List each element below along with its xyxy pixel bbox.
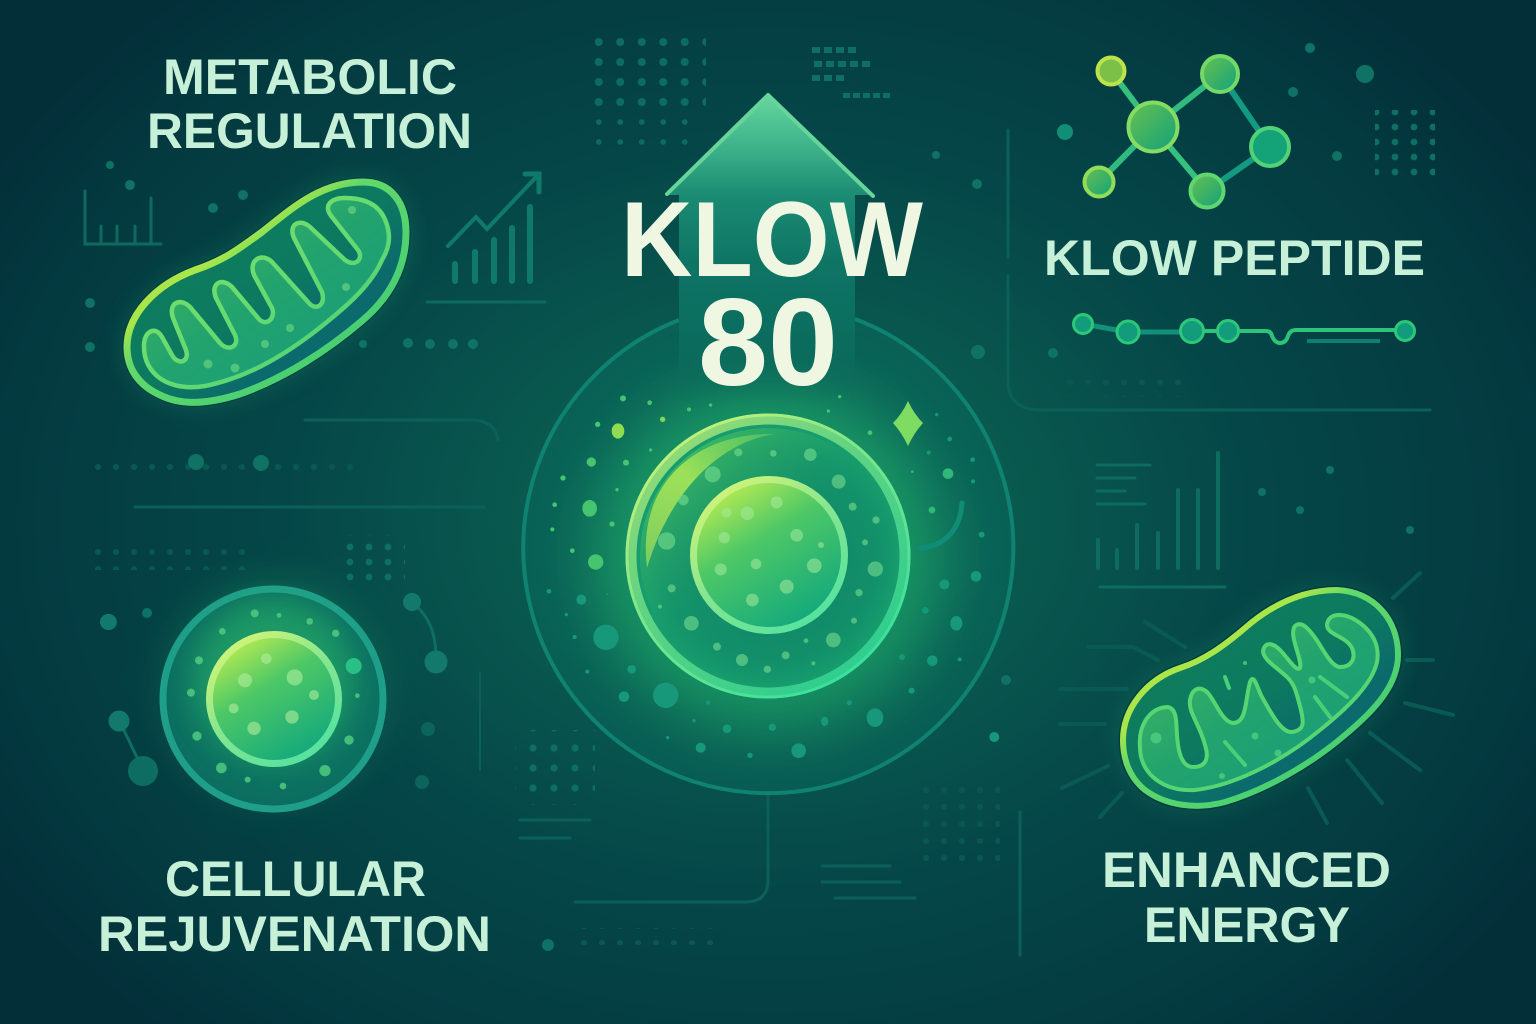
cell bottom-left [100,589,448,809]
background bar chart right [1097,453,1225,587]
small bar chart icon [85,191,161,244]
arrow [665,93,873,405]
central cell [547,395,999,758]
rising chart icon [427,174,545,302]
mitochondrion rays [1060,573,1453,823]
title: KLOW 80: 80 [698,274,838,412]
background circuit lines [135,130,1430,955]
matrix with cristae [144,198,389,387]
icon: peptide chain [1074,314,1414,343]
nucleus [693,479,845,631]
cell body [629,417,907,695]
icon: mitochondrion top-left [127,182,406,402]
matrix with cristae [1140,615,1378,790]
icon: mitochondrion bottom-right [1123,590,1398,806]
label: enhanced energy: ENERGY [1144,897,1350,953]
center glow [523,303,1013,793]
background dot grids [85,32,1435,945]
label: cellular rejuvenation: CELLULAR [165,851,426,907]
icon: diamond sparkle [893,401,923,446]
background scattered dots [85,43,1414,951]
title: metabolic regulation [147,49,472,159]
title: metabolic regulation: REGULATION [147,103,472,159]
label: enhanced energy: ENHANCED [1102,842,1391,898]
label: cellular rejuvenation: REJUVENATION [98,906,491,962]
molecule side dot [1057,124,1073,140]
label: klow peptide: KLOW PEPTIDE [1044,230,1425,286]
label: cellular rejuvenation [98,851,491,962]
small arc [920,503,962,548]
cytoplasm dots [658,448,883,673]
title: metabolic regulation: METABOLIC [163,49,457,105]
big orbit ring [523,319,1013,793]
title: KLOW 80 [621,179,923,412]
title: KLOW 80: KLOW [621,179,923,299]
label: enhanced energy [1102,842,1391,953]
crescent highlight [646,434,775,568]
faint linked nodes [100,593,448,789]
surrounding particles bright [550,395,872,570]
icon: molecule [1084,56,1289,208]
